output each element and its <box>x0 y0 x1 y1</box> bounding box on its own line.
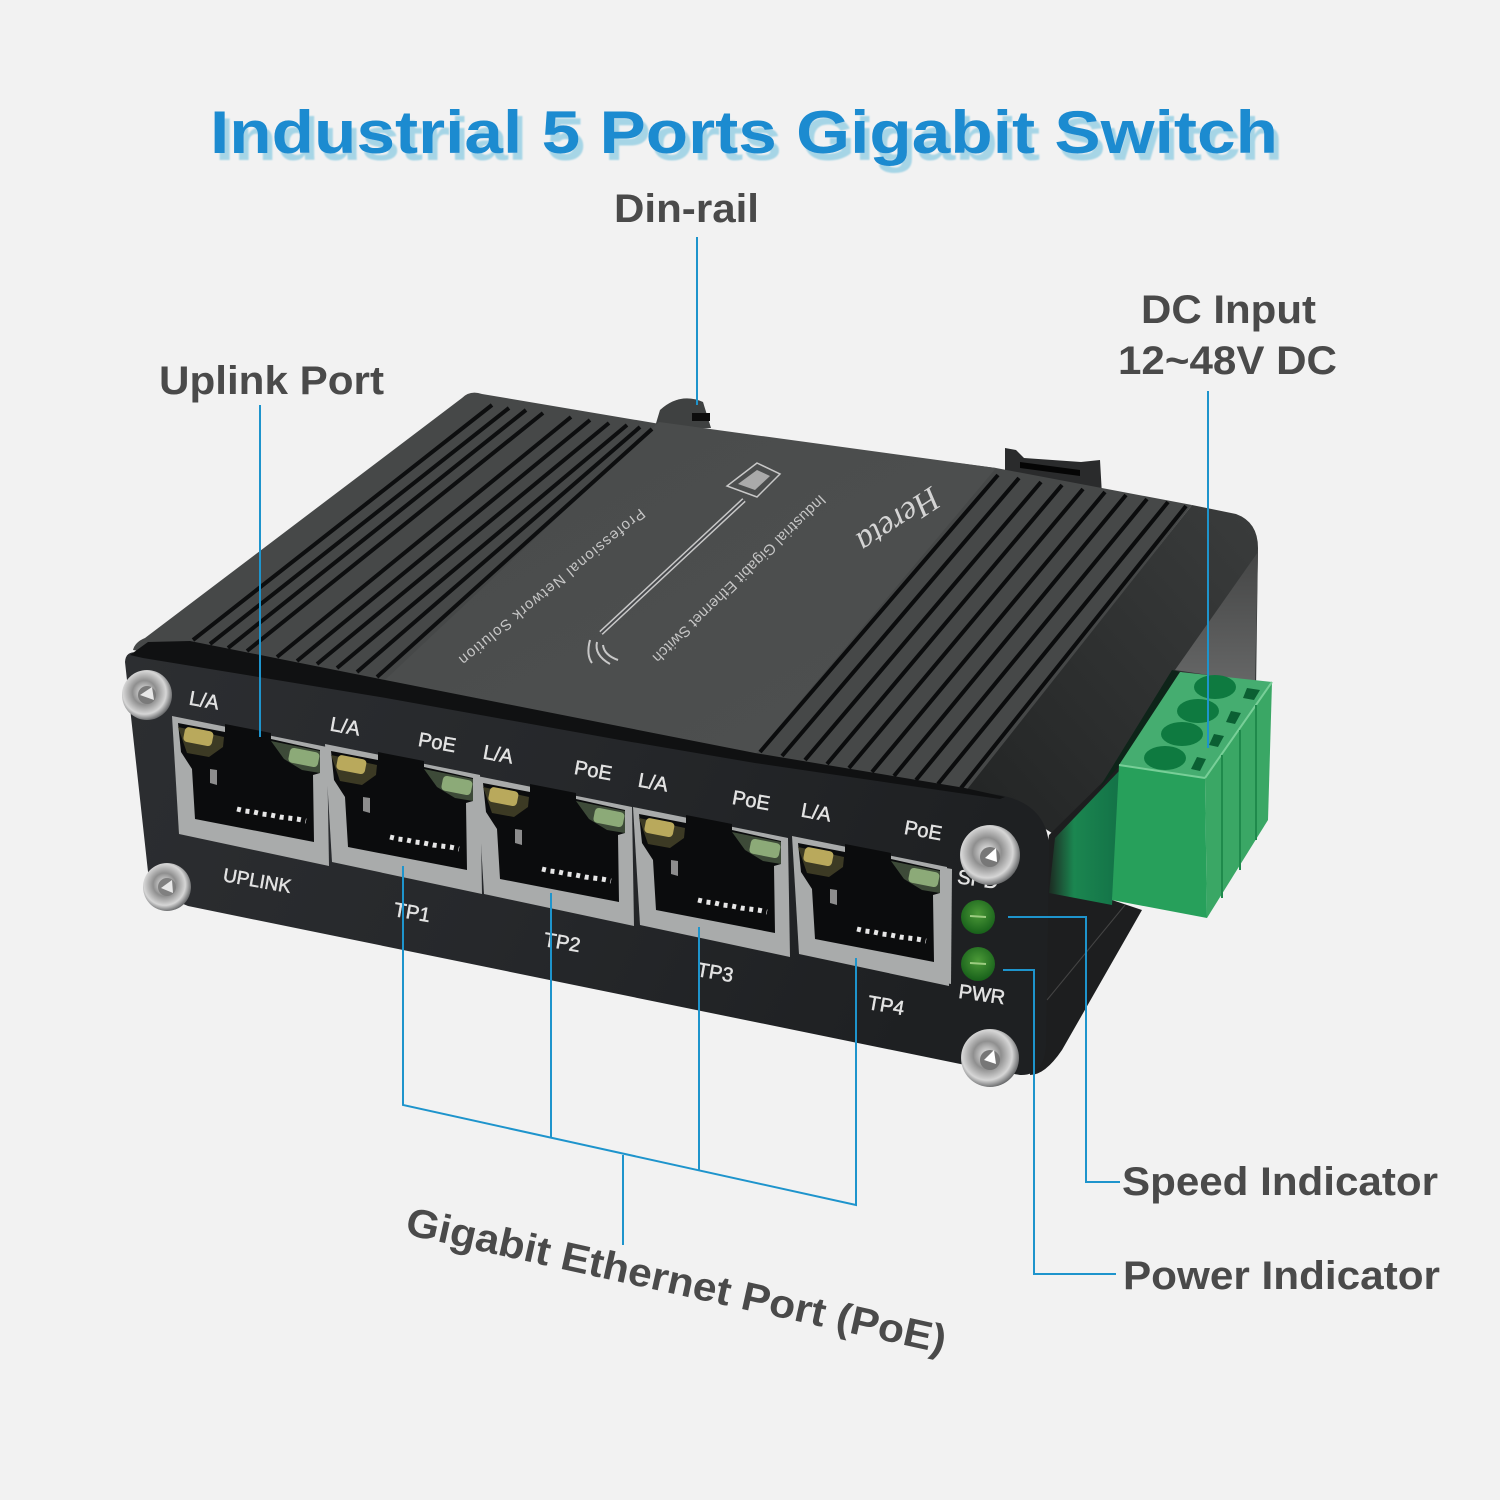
panel labels: PoE <box>731 787 772 815</box>
device: top face <box>133 393 1192 792</box>
printed text: ethernet switch: Industrial Gigabit Ethernet Switch <box>649 491 829 666</box>
port TP2 <box>477 776 634 926</box>
panel labels: TP2 <box>542 929 582 957</box>
printed text: network solution: Professional Network Solution <box>455 505 648 668</box>
panel labels: L/A <box>799 800 833 827</box>
leader: uplink <box>259 405 261 737</box>
leader: speed indicator <box>1008 917 1120 1182</box>
label: dc input <box>1118 288 1337 383</box>
panel labels: L/A <box>187 688 221 715</box>
leader: ethernet ports bracket <box>403 866 856 1245</box>
top flat panel <box>385 422 996 755</box>
panel labels: PoE <box>417 729 458 757</box>
cooling fins right <box>760 475 1186 788</box>
cooling fins left <box>193 405 652 677</box>
port TP4 <box>792 836 952 986</box>
device: terminal block <box>1112 672 1272 918</box>
panel labels: TP1 <box>392 899 432 927</box>
screws <box>122 670 1020 1087</box>
label: dc input: DC Input <box>1141 288 1316 332</box>
printed brand: Hereta <box>849 479 948 560</box>
port TP3 <box>633 807 790 957</box>
device: front panel <box>122 641 1049 1087</box>
label: din-rail: Din-rail <box>614 187 759 231</box>
speed LED <box>961 900 995 934</box>
title: Industrial 5 Ports Gigabit Switch <box>210 99 1278 166</box>
panel labels: PoE <box>903 817 944 845</box>
panel labels: UPLINK <box>221 865 293 898</box>
panel labels: L/A <box>636 770 670 797</box>
panel labels <box>187 688 1006 1020</box>
printed line and logo <box>588 463 780 664</box>
panel labels: TP3 <box>695 959 735 987</box>
panel labels: PoE <box>573 757 614 785</box>
label: gigabit ethernet port: Gigabit Ethernet Port (PoE) <box>402 1200 950 1362</box>
device: din-rail clips <box>654 398 1102 495</box>
label: dc input: 12~48V DC <box>1118 339 1337 383</box>
panel labels: L/A <box>481 742 515 769</box>
leader: dc input <box>1207 391 1209 748</box>
panel labels: PWR <box>957 981 1006 1009</box>
uplink port <box>172 716 329 866</box>
label: speed indicator: Speed Indicator <box>1122 1160 1438 1204</box>
panel labels: L/A <box>328 714 362 741</box>
panel labels: TP4 <box>866 992 906 1020</box>
power LED <box>961 947 995 981</box>
port TP1 <box>325 744 482 894</box>
panel labels: SPD <box>956 866 1000 894</box>
leader: power indicator <box>1003 970 1116 1274</box>
leader: din-rail <box>696 237 698 405</box>
label: uplink port: Uplink Port <box>159 359 384 403</box>
device: side wall <box>965 505 1258 1075</box>
label: power indicator: Power Indicator <box>1123 1254 1440 1298</box>
